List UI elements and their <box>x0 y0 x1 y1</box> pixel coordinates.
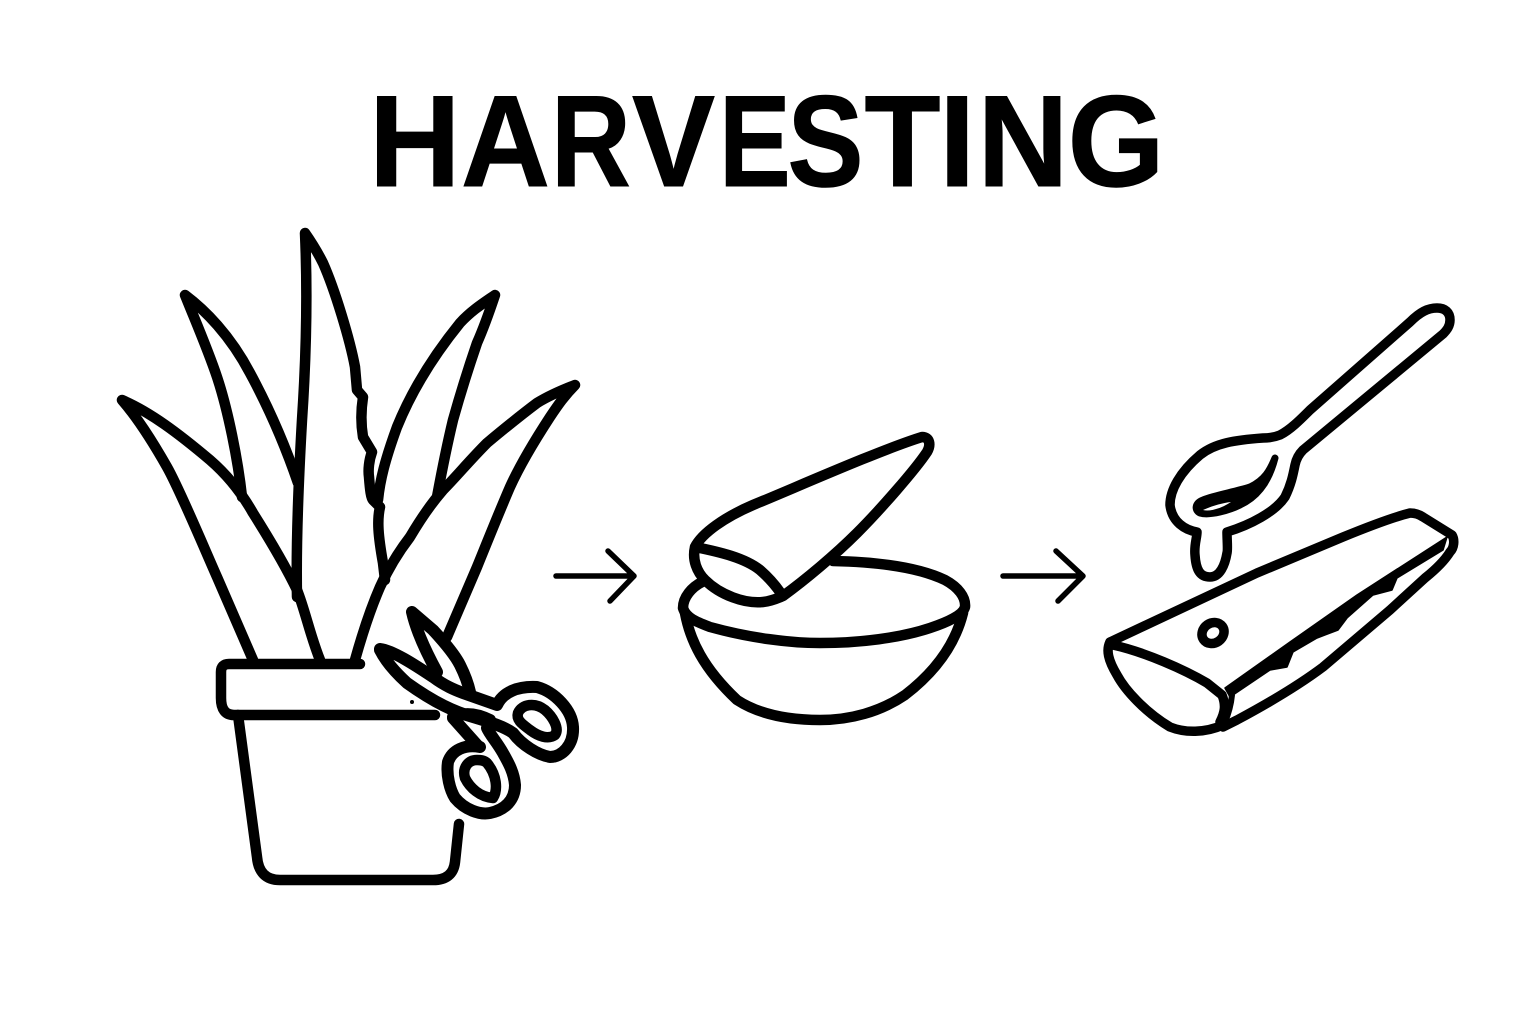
title: T <box>864 68 940 214</box>
title: V <box>632 68 715 214</box>
leaf outline <box>1110 513 1454 727</box>
rind end stroke <box>1225 695 1232 722</box>
icon: spoon dripping gel <box>1170 308 1450 577</box>
leaf: mid right <box>378 295 495 500</box>
left handle <box>447 728 515 813</box>
title: R <box>551 68 631 214</box>
blade and right handle <box>380 649 573 757</box>
title: E <box>719 68 791 214</box>
bowl rim <box>683 561 965 643</box>
right handle inner ring <box>518 705 557 737</box>
title: A <box>461 68 550 214</box>
gel drop <box>1198 618 1228 648</box>
arrow: first <box>556 551 634 601</box>
icon: sliced aloe leaf <box>1108 513 1454 731</box>
leaf: far right <box>355 385 575 660</box>
title: G <box>1068 68 1164 214</box>
title: I <box>939 68 975 214</box>
bowl body <box>685 613 963 720</box>
icon: aloe plant in pot <box>122 233 575 880</box>
aloe leaf piece <box>694 437 929 602</box>
left handle inner ring <box>464 760 496 798</box>
icon: scissors <box>380 612 573 813</box>
pot rim <box>221 664 435 715</box>
leaf: far left <box>122 400 320 660</box>
spoon outline <box>1170 308 1450 577</box>
gel in spoon <box>1196 458 1275 514</box>
title: N <box>978 68 1068 214</box>
arrow: second <box>1003 551 1083 601</box>
icon: bowl with aloe leaf <box>683 437 965 720</box>
leaf: mid left <box>185 295 298 497</box>
title: S <box>788 68 864 214</box>
gel highlight <box>1203 502 1231 511</box>
speck on pot <box>410 700 414 704</box>
leaf: center <box>297 233 385 597</box>
shank <box>453 714 490 746</box>
inner rind edge <box>1225 537 1447 697</box>
cut end <box>1108 642 1224 731</box>
pot body <box>238 715 459 880</box>
second blade <box>412 612 470 692</box>
title: H <box>369 68 461 214</box>
